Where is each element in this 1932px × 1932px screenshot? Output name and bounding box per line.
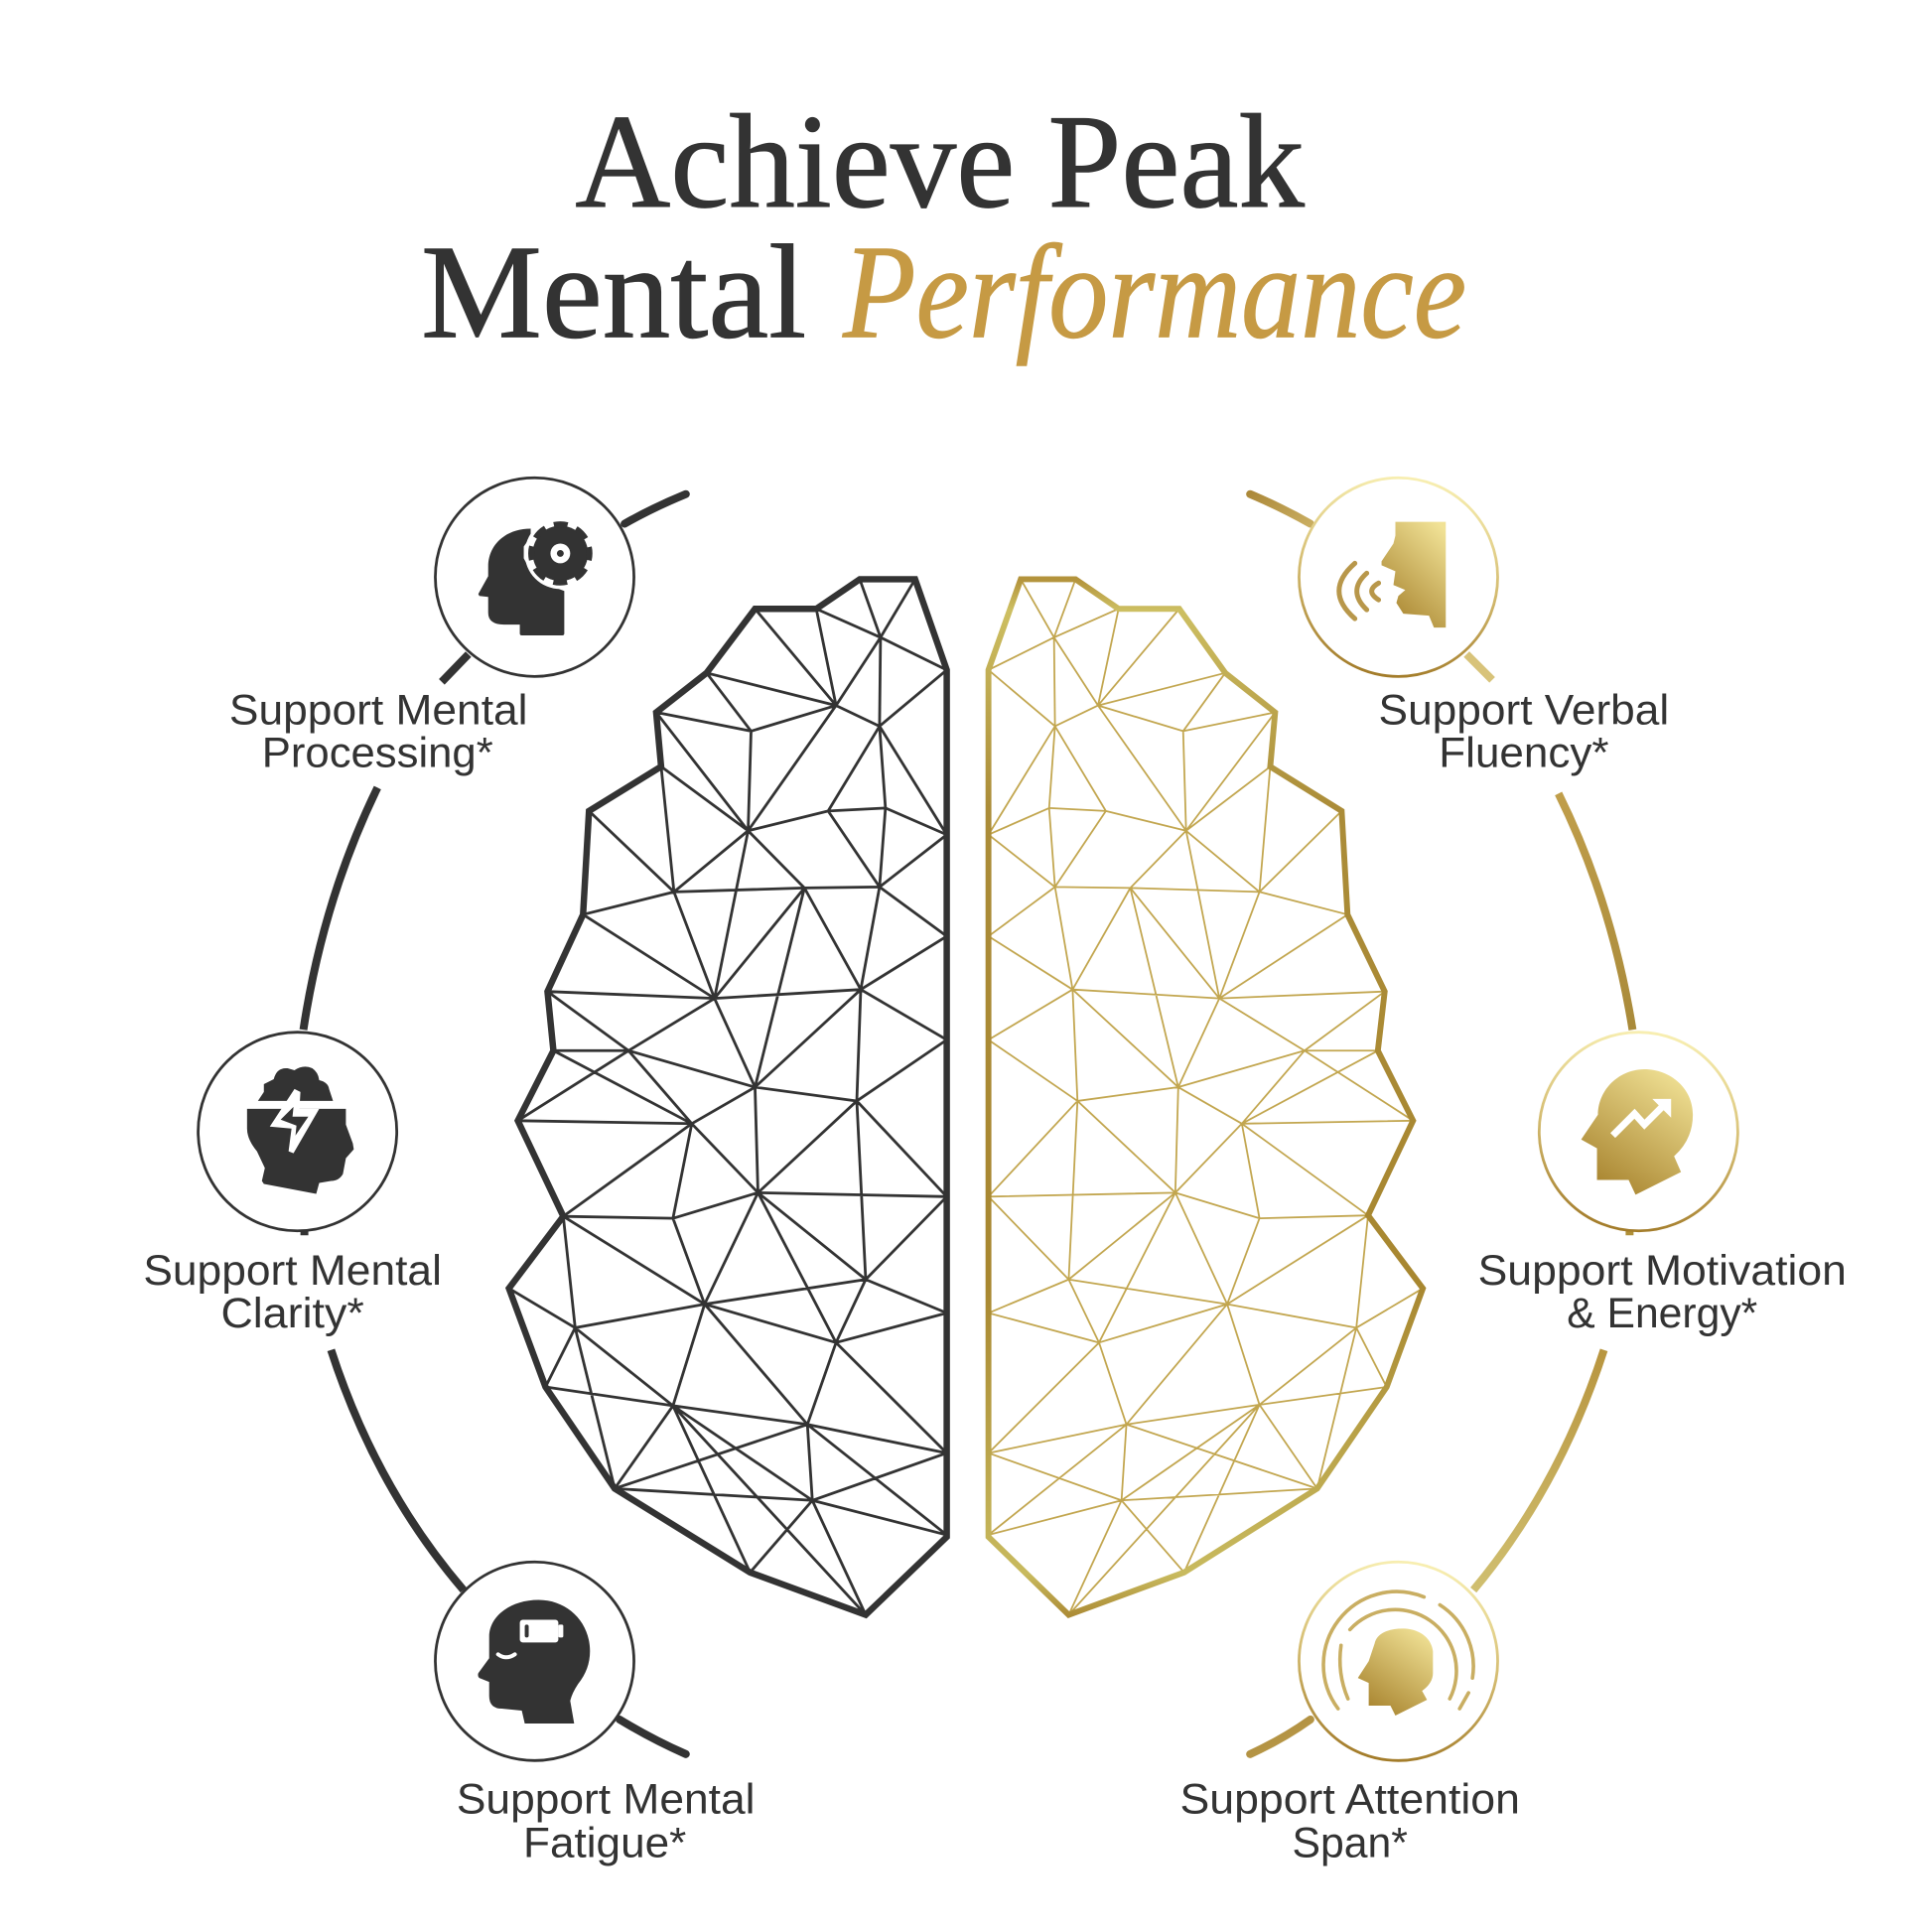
head with signal arcs icon [1323, 1591, 1473, 1716]
title line 1: Achieve Peak [575, 87, 1305, 236]
label: support mental clarity: Support Mental [143, 1247, 442, 1295]
label: support attention span [1180, 1776, 1520, 1866]
head with low battery icon [478, 1600, 590, 1724]
icon badge: mental processing [435, 478, 634, 676]
label: support motivation and energy: & Energy* [1567, 1290, 1757, 1337]
right brain mesh [989, 579, 1423, 1615]
label: support mental fatigue: Support Mental [457, 1776, 755, 1824]
icon badge: attention span [1299, 1562, 1498, 1760]
badge ring [199, 1033, 397, 1231]
label: support mental clarity: Clarity* [220, 1290, 364, 1337]
icon badge: motivation and energy [1539, 1033, 1737, 1231]
right gold arc segments [1250, 494, 1633, 1754]
label: support mental processing: Processing* [262, 729, 493, 776]
right brain hemisphere [989, 579, 1423, 1615]
speaking face icon [1339, 522, 1446, 627]
label: support mental processing: Support Mental [229, 687, 528, 735]
badge ring [1539, 1033, 1737, 1231]
icon badge: verbal fluency [1299, 478, 1498, 676]
left brain mesh [509, 579, 947, 1615]
icon badge: mental clarity [199, 1033, 397, 1231]
label: support attention span: Span* [1292, 1819, 1408, 1866]
icon badge: mental fatigue [435, 1562, 634, 1760]
badge ring [435, 478, 634, 676]
label: support verbal fluency: Support Verbal [1379, 687, 1669, 735]
head with rising arrow icon [1582, 1069, 1693, 1194]
label: support mental clarity [143, 1247, 442, 1337]
title line 2: Mental: Mental [421, 217, 806, 366]
head with gear icon [479, 518, 596, 635]
left brain hemisphere [509, 579, 947, 1615]
right brain outline [989, 579, 1423, 1615]
label: support mental fatigue [457, 1776, 755, 1866]
title [421, 87, 1466, 366]
head with lightning icon [247, 1066, 353, 1193]
label: support verbal fluency: Fluency* [1439, 729, 1609, 776]
badge ring [1299, 1562, 1498, 1760]
label: support mental processing [229, 687, 528, 776]
left dark arc segments [301, 494, 686, 1754]
badge ring [435, 1562, 634, 1760]
left brain outline [509, 579, 947, 1615]
label: support mental fatigue: Fatigue* [523, 1819, 686, 1866]
label: support attention span: Support Attention [1180, 1776, 1520, 1824]
label: support motivation and energy [1478, 1247, 1847, 1337]
label: support motivation and energy: Support Motivation [1478, 1247, 1847, 1295]
title line 2: Performance: Performance [842, 217, 1466, 366]
badge ring [1299, 478, 1498, 676]
label: support verbal fluency [1379, 687, 1669, 776]
